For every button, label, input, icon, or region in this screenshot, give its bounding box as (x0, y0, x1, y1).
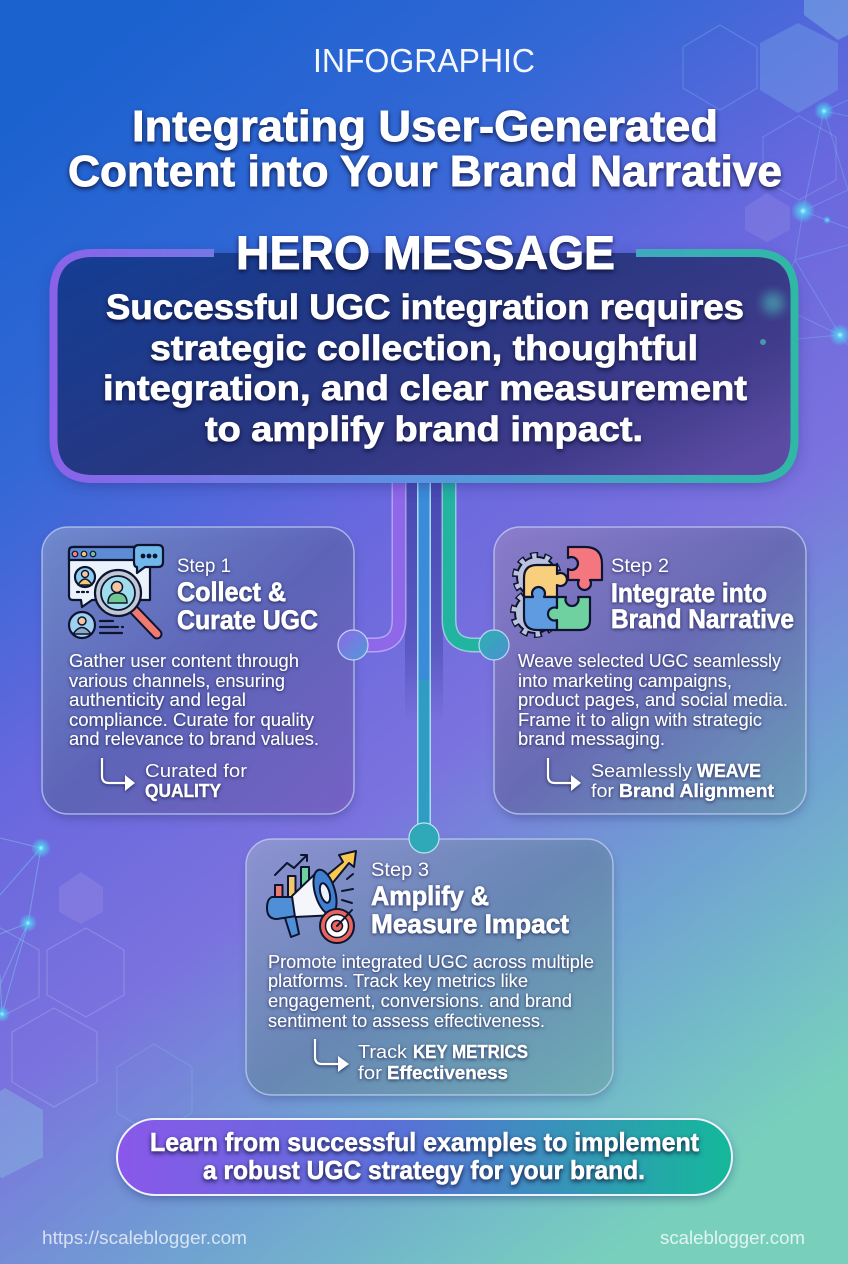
hero text (103, 288, 747, 449)
panel: step 3 (246, 839, 613, 1099)
decorative hexagons bottom left (0, 872, 192, 1178)
decorative network bottom left (0, 838, 51, 1022)
step 2 takeaway: for (591, 780, 614, 801)
connector node: step 3 (409, 823, 439, 853)
step 2 body: into marketing campaigns, (518, 671, 732, 691)
decorative hexagons top right (683, 0, 848, 242)
hero text: Successful UGC integration requires (106, 288, 744, 327)
step 1 body: and relevance to brand values. (69, 729, 319, 749)
step 2 body: Frame it to align with strategic (518, 710, 762, 730)
title (68, 102, 782, 196)
hero text: strategic collection, thoughtful (150, 329, 698, 368)
step 1 takeaway: Curated for (145, 760, 247, 781)
step 1 heading: Curate UGC (177, 605, 318, 635)
step 2 body (518, 651, 788, 749)
hero text: integration, and clear measurement (103, 369, 747, 408)
step 2 takeaway (591, 760, 774, 801)
step 1 takeaway: QUALITY (145, 780, 222, 801)
icon: megaphone and target (267, 851, 356, 943)
step 2 takeaway: Brand Alignment (619, 780, 774, 801)
step 2 takeaway: WEAVE (697, 760, 761, 781)
step 2 heading: Brand Narrative (611, 604, 794, 634)
step 3 body: platforms. Track key metrics like (268, 971, 528, 991)
step 1 heading (177, 555, 318, 635)
step 1 heading: Step 1 (177, 555, 231, 577)
step 1 takeaway (145, 760, 247, 801)
step 3 body (268, 952, 594, 1031)
call to action pill (117, 1119, 732, 1198)
step 3 heading: Amplify & (371, 881, 489, 911)
step 1 body: Gather user content through (69, 651, 299, 671)
step 3 takeaway: for (358, 1062, 382, 1083)
panel: step 2 (494, 527, 806, 818)
step 2 heading: Integrate into (611, 578, 767, 608)
connector lines (353, 480, 494, 830)
decorative network top right (763, 100, 848, 346)
step 3 body: engagement, conversions. and brand (268, 991, 572, 1011)
title: Content into Your Brand Narrative (68, 147, 782, 196)
step 2 body: product pages, and social media. (518, 690, 788, 710)
title: Integrating User-Generated (132, 102, 718, 151)
hero text: to amplify brand impact. (205, 410, 643, 449)
call to action pill: a robust UGC strategy for your brand. (203, 1155, 645, 1185)
call to action pill: Learn from successful examples to implement (150, 1127, 699, 1157)
panel: hero message (53, 226, 795, 484)
step 2 heading: Step 2 (611, 555, 669, 577)
arrow: step 3 (315, 1039, 349, 1072)
arrow: step 1 (102, 758, 135, 791)
step 3 heading: Step 3 (371, 859, 429, 881)
connector node: step 2 (479, 630, 509, 660)
step 3 takeaway: KEY METRICS (413, 1041, 528, 1062)
icon: gear and puzzle (514, 547, 602, 634)
step 2 body: brand messaging. (518, 729, 665, 749)
step 3 body: sentiment to assess effectiveness. (268, 1011, 545, 1031)
step 1 heading: Collect & (177, 577, 286, 607)
step 1 body: compliance. Curate for quality (69, 710, 314, 730)
footer url left: https://scaleblogger.com (42, 1228, 247, 1248)
step 1 body: various channels, ensuring (69, 671, 285, 691)
label: infographic: INFOGRAPHIC (313, 42, 535, 79)
hero heading: HERO MESSAGE (236, 226, 615, 279)
step 3 body: Promote integrated UGC across multiple (268, 952, 594, 972)
step 1 body: authenticity and legal (69, 690, 246, 710)
footer url right: scaleblogger.com (660, 1228, 805, 1248)
step 3 heading (371, 859, 569, 939)
step 3 takeaway: Effectiveness (387, 1062, 508, 1083)
icon: user content search (69, 545, 163, 638)
step 2 heading (611, 555, 794, 634)
step 3 takeaway (358, 1041, 528, 1083)
connector node: step 1 (338, 630, 368, 660)
arrow: step 2 (548, 758, 581, 791)
step 2 takeaway: Seamlessly (591, 760, 693, 781)
step 3 takeaway: Track (358, 1041, 408, 1062)
step 1 body (69, 651, 319, 749)
step 3 heading: Measure Impact (371, 909, 569, 939)
panel: step 1 (42, 527, 354, 818)
step 2 body: Weave selected UGC seamlessly (518, 651, 781, 671)
